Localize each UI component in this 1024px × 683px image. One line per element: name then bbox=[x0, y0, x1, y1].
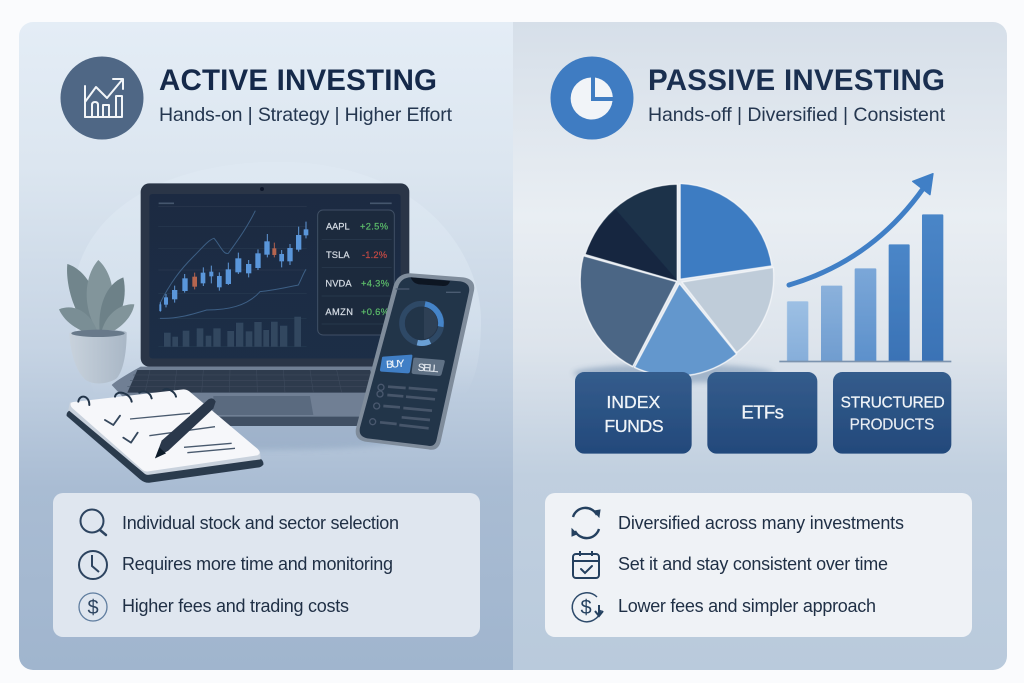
label: structured products: PRODUCTS bbox=[850, 417, 934, 434]
icon: refresh arrows bbox=[572, 508, 600, 538]
ticker panel: +2.5% bbox=[360, 221, 388, 231]
text: time and monitoring: Requires more time and monitoring bbox=[122, 554, 393, 574]
icon: dollar coin: $ bbox=[87, 597, 99, 619]
label: index funds: FUNDS bbox=[604, 416, 664, 436]
subtitle: Hands-on | Strategy | Higher Effort bbox=[159, 104, 453, 126]
ticker panel: TSLA bbox=[326, 250, 350, 260]
ticker panel: -1.2% bbox=[362, 250, 387, 260]
buy button: BUY bbox=[386, 359, 405, 371]
ticker panel bbox=[318, 210, 394, 335]
desk shadow bbox=[90, 417, 437, 450]
panel: active investing background bbox=[19, 22, 513, 670]
subtitle: Hands-off | Diversified | Consistent bbox=[648, 104, 946, 126]
volume bars bbox=[164, 317, 301, 347]
label: index funds bbox=[575, 372, 692, 454]
icon: magnifier bbox=[80, 510, 106, 535]
candlesticks bbox=[159, 222, 308, 312]
illustration: trading desk bbox=[59, 183, 474, 483]
backdrop blob behind laptop bbox=[73, 162, 481, 395]
panel: active traits list bbox=[53, 493, 480, 637]
text: lower fees: Lower fees and simpler approach bbox=[618, 596, 876, 616]
panel: passive traits list bbox=[545, 493, 972, 637]
icon: laptop bbox=[112, 183, 410, 426]
ticker panel: AMZN bbox=[325, 307, 353, 317]
ticker panel: +4.3% bbox=[361, 279, 389, 289]
icon: pie chart badge bbox=[550, 56, 634, 140]
label: structured products: STRUCTURED bbox=[841, 395, 945, 412]
title: PASSIVE INVESTING bbox=[648, 64, 945, 97]
ticker panel: +0.6% bbox=[361, 307, 389, 317]
label: index funds: INDEX bbox=[606, 392, 661, 412]
ticker panel: NVDA bbox=[325, 279, 352, 289]
illustration: pie chart and rising bars bbox=[573, 174, 951, 454]
bar chart bbox=[779, 214, 951, 362]
icon: dollar with down arrow bbox=[572, 593, 603, 622]
label: structured products bbox=[833, 372, 951, 454]
ticker panel: AAPL bbox=[326, 221, 350, 231]
icon: dollar with down arrow: $ bbox=[580, 597, 592, 619]
header: passive investing bbox=[550, 56, 946, 140]
icon: dollar coin bbox=[79, 593, 107, 621]
pie chart bbox=[580, 183, 774, 376]
title: ACTIVE INVESTING bbox=[159, 64, 437, 97]
sell button bbox=[412, 358, 445, 376]
icon: notepad with pen bbox=[67, 389, 263, 483]
buy button bbox=[380, 355, 412, 373]
text: fees: Higher fees and trading costs bbox=[122, 596, 349, 616]
phone donut chart bbox=[402, 304, 441, 343]
chart lines bbox=[160, 211, 255, 303]
icon: smartphone bbox=[356, 273, 474, 450]
icon: potted plant bbox=[59, 260, 134, 383]
sell button: SELL bbox=[417, 363, 439, 375]
growth arrow bbox=[789, 174, 933, 285]
header: active investing bbox=[60, 56, 453, 140]
icon: line chart badge bbox=[60, 56, 144, 140]
icon: calendar check bbox=[573, 551, 599, 578]
text: stock selection: Individual stock and sector selection bbox=[122, 513, 399, 533]
text: consistent: Set it and stay consistent over time bbox=[618, 554, 888, 574]
label: ETFs bbox=[707, 372, 817, 454]
label: ETFs: ETFs bbox=[741, 402, 784, 423]
text: diversified: Diversified across many investments bbox=[618, 513, 904, 533]
panel: passive investing background bbox=[513, 22, 1007, 670]
icon: clock bbox=[79, 551, 107, 579]
